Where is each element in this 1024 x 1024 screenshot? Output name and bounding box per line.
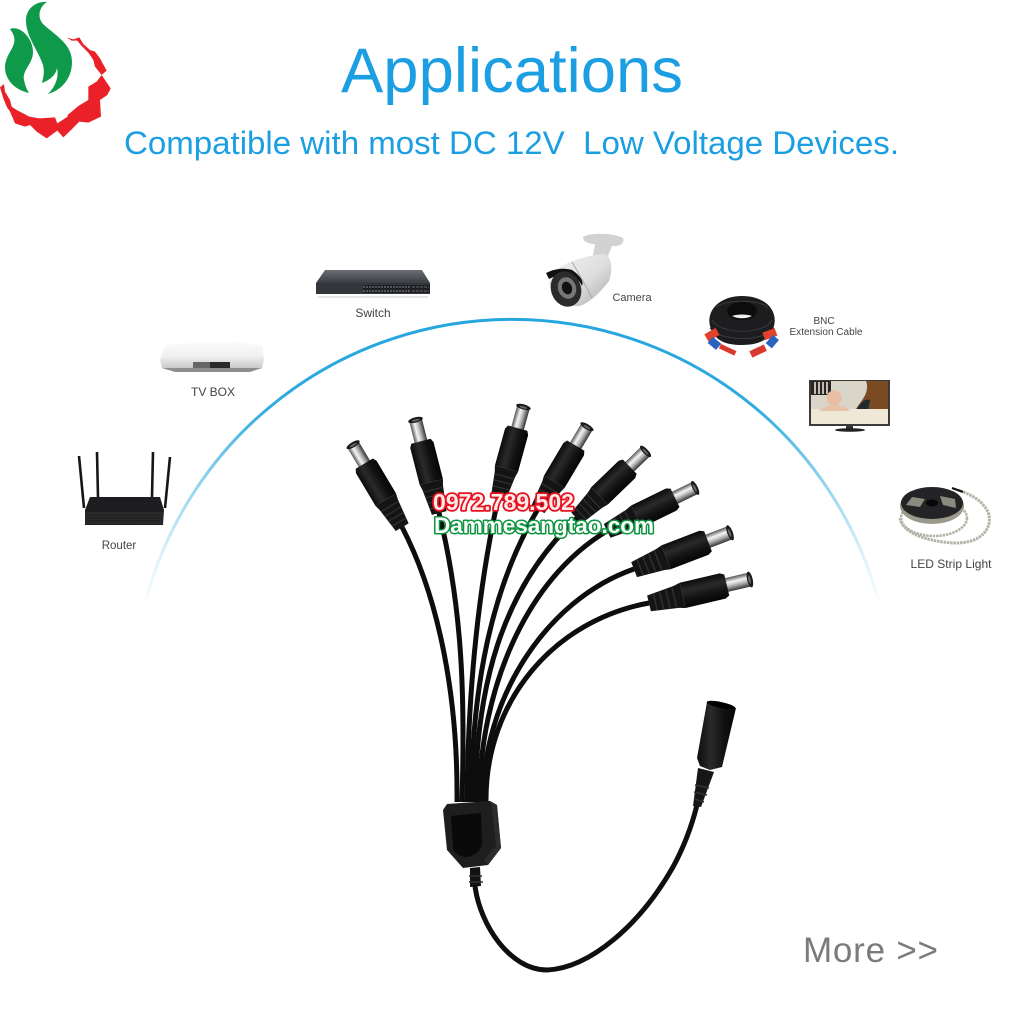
device: BNC extension cable: Extension Cable xyxy=(790,327,863,338)
subtitle: Compatible with most DC 12V Low Voltage Devices. xyxy=(124,125,899,161)
device: switch xyxy=(316,270,430,320)
splitter cable: eight branch wires xyxy=(402,499,649,802)
main cable and female jack xyxy=(475,699,736,970)
device: LED strip light xyxy=(900,487,992,571)
device: switch: Switch xyxy=(355,306,391,320)
title: Applications xyxy=(341,36,683,106)
device: television xyxy=(809,380,890,432)
splitter hub xyxy=(443,801,501,887)
device: router xyxy=(79,452,170,552)
device: TV box: TV BOX xyxy=(191,385,235,399)
device: router: Router xyxy=(102,540,136,552)
DC male plugs xyxy=(341,401,756,616)
logo: green flames with red gear xyxy=(0,2,111,138)
watermark: phone number: 0972.789.502 xyxy=(433,489,574,515)
device: BNC extension cable: BNC xyxy=(813,316,835,327)
device: TV box xyxy=(160,342,264,399)
device: camera: Camera xyxy=(612,292,652,304)
watermark: website: Dammesangtao.com xyxy=(434,513,654,538)
device: camera xyxy=(546,234,652,311)
more link: More >> xyxy=(803,931,938,970)
device: LED strip light: LED Strip Light xyxy=(910,557,992,571)
device: BNC extension cable xyxy=(704,296,863,358)
blue arc xyxy=(146,319,878,600)
